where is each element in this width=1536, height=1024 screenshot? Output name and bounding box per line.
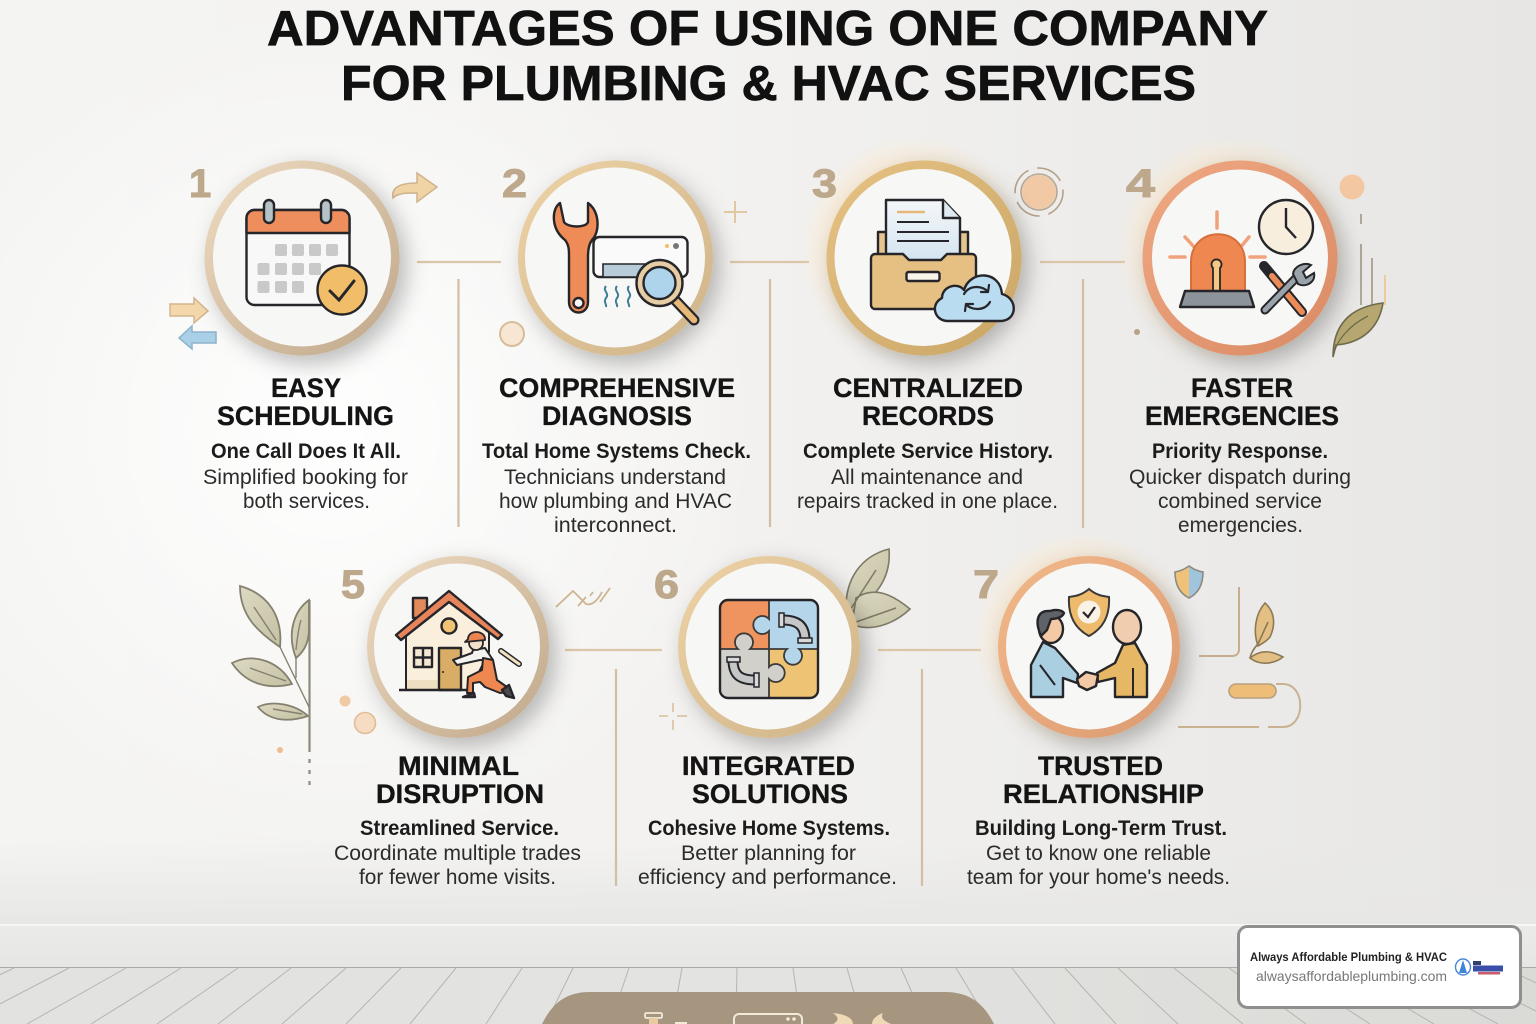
decorative circles row two (277, 696, 376, 753)
step 3 text: Complete Service History. (803, 440, 1053, 463)
connector lines row two (565, 650, 981, 886)
step 1 number: 1 (189, 162, 211, 206)
step 2 badge (518, 160, 713, 356)
step 7 text: Building Long-Term Trust. (975, 817, 1227, 840)
step 1 text: SCHEDULING (217, 401, 394, 431)
company card: Always Affordable Plumbing & HVAC (1250, 950, 1447, 964)
step 7 text: TRUSTED (1038, 751, 1163, 781)
step 2 number: 2 (502, 162, 527, 206)
step 5 text: for fewer home visits. (359, 866, 556, 889)
step 6 integrated solutions (638, 556, 897, 889)
decorative leaf right (1333, 303, 1383, 357)
step 6 badge (678, 556, 860, 738)
step 1 text: both services. (243, 490, 370, 513)
step 7 text: RELATIONSHIP (1003, 779, 1204, 809)
decorative icon: swap arrows (170, 298, 216, 349)
step 7 number: 7 (973, 563, 999, 607)
step 4 faster emergencies (1126, 160, 1351, 537)
step 6 text: efficiency and performance. (638, 866, 897, 889)
step 4 badge (1142, 160, 1338, 356)
step 2 text: interconnect. (554, 514, 677, 537)
step 5 minimal disruption (334, 556, 581, 889)
decorative icon: curved arrow (393, 173, 437, 202)
step 6 text (638, 751, 897, 889)
step 3 badge (826, 160, 1022, 356)
step 5 text (334, 751, 581, 889)
step 1 text: EASY (271, 373, 341, 403)
bottom tan panel with icons (542, 992, 994, 1024)
step 7 text (967, 751, 1230, 889)
step 4 text: combined service (1158, 490, 1322, 513)
icon: house with repair technician (396, 591, 519, 698)
step 5 text: MINIMAL (398, 751, 519, 781)
decorative leaves behind six (846, 549, 910, 628)
step 2 text: how plumbing and HVAC (499, 490, 732, 513)
icon: handshake and shield (1031, 589, 1147, 697)
connector lines row one (417, 262, 1125, 528)
step 4 text: Quicker dispatch during (1129, 466, 1351, 489)
icon: folder with document and cloud sync (871, 200, 1014, 321)
step 1 badge (204, 160, 400, 356)
wood floor (0, 968, 1536, 1024)
decorative pill with line (1178, 684, 1300, 727)
step 6 text: Cohesive Home Systems. (648, 817, 890, 840)
step 3 text: RECORDS (862, 401, 994, 431)
step 5 number: 5 (341, 563, 365, 607)
step 5 text: DISRUPTION (376, 779, 544, 809)
step 5 text: Streamlined Service. (360, 817, 559, 840)
step 5 text: Coordinate multiple trades (334, 842, 581, 865)
decorative zigzag (556, 588, 610, 607)
step 1 text: Simplified booking for (203, 466, 408, 489)
step 1 easy scheduling (189, 160, 408, 513)
icon: calendar with check (246, 200, 366, 314)
step 2 text: COMPREHENSIVE (499, 373, 735, 403)
step 7 text: Get to know one reliable (986, 842, 1211, 865)
step 6 number: 6 (654, 563, 679, 607)
step 5 badge (367, 556, 549, 738)
decorative dot (500, 322, 524, 346)
step 4 text (1129, 373, 1351, 537)
step 7 trusted relationship (967, 556, 1230, 889)
baseboard (0, 924, 1536, 968)
step 3 text: All maintenance and (831, 466, 1023, 489)
title (267, 2, 1268, 111)
step 4 number: 4 (1126, 162, 1156, 206)
step 4 text: EMERGENCIES (1145, 401, 1339, 431)
decorative plus (724, 201, 747, 223)
step 1 text: One Call Does It All. (211, 440, 401, 463)
icon: siren, clock and tools (1170, 200, 1314, 312)
step 1 text (203, 373, 408, 513)
icon: company logo (1456, 959, 1503, 975)
title: ADVANTAGES OF USING ONE COMPANY (267, 2, 1268, 56)
step 2 text: Technicians understand (504, 466, 726, 489)
step 3 text: repairs tracked in one place. (797, 490, 1058, 513)
decorative dots and bars (1134, 174, 1385, 335)
step 3 text: CENTRALIZED (833, 373, 1023, 403)
icon: wrench, AC unit and magnifier (554, 203, 694, 320)
decorative target (1015, 168, 1063, 216)
step 4 text: FASTER (1191, 373, 1293, 403)
decorative sparkle (659, 703, 687, 730)
step 2 comprehensive diagnosis (482, 160, 751, 537)
decorative sprout (1250, 603, 1283, 663)
step 7 text: team for your home's needs. (967, 866, 1230, 889)
step 7 badge (998, 556, 1180, 738)
company card (1238, 926, 1520, 1008)
step 6 text: INTEGRATED (682, 751, 855, 781)
decorative right angle line (1199, 587, 1239, 656)
decorative branch left (232, 586, 310, 785)
decorative shield (1175, 566, 1203, 598)
step 4 text: Priority Response. (1152, 440, 1328, 463)
step 3 number: 3 (812, 162, 837, 206)
step 2 text: DIAGNOSIS (542, 401, 692, 431)
step 3 text (797, 373, 1058, 513)
icon: puzzle with pipes (720, 600, 818, 698)
step 6 text: Better planning for (681, 842, 856, 865)
step 6 text: SOLUTIONS (692, 779, 848, 809)
step 4 text: emergencies. (1178, 514, 1303, 537)
step 2 text (482, 373, 751, 537)
title: FOR PLUMBING & HVAC SERVICES (341, 57, 1196, 111)
company card: alwaysaffordableplumbing.com (1256, 968, 1447, 984)
step 2 text: Total Home Systems Check. (482, 440, 751, 463)
step 3 centralized records (797, 160, 1058, 513)
step glows (801, 136, 1346, 748)
